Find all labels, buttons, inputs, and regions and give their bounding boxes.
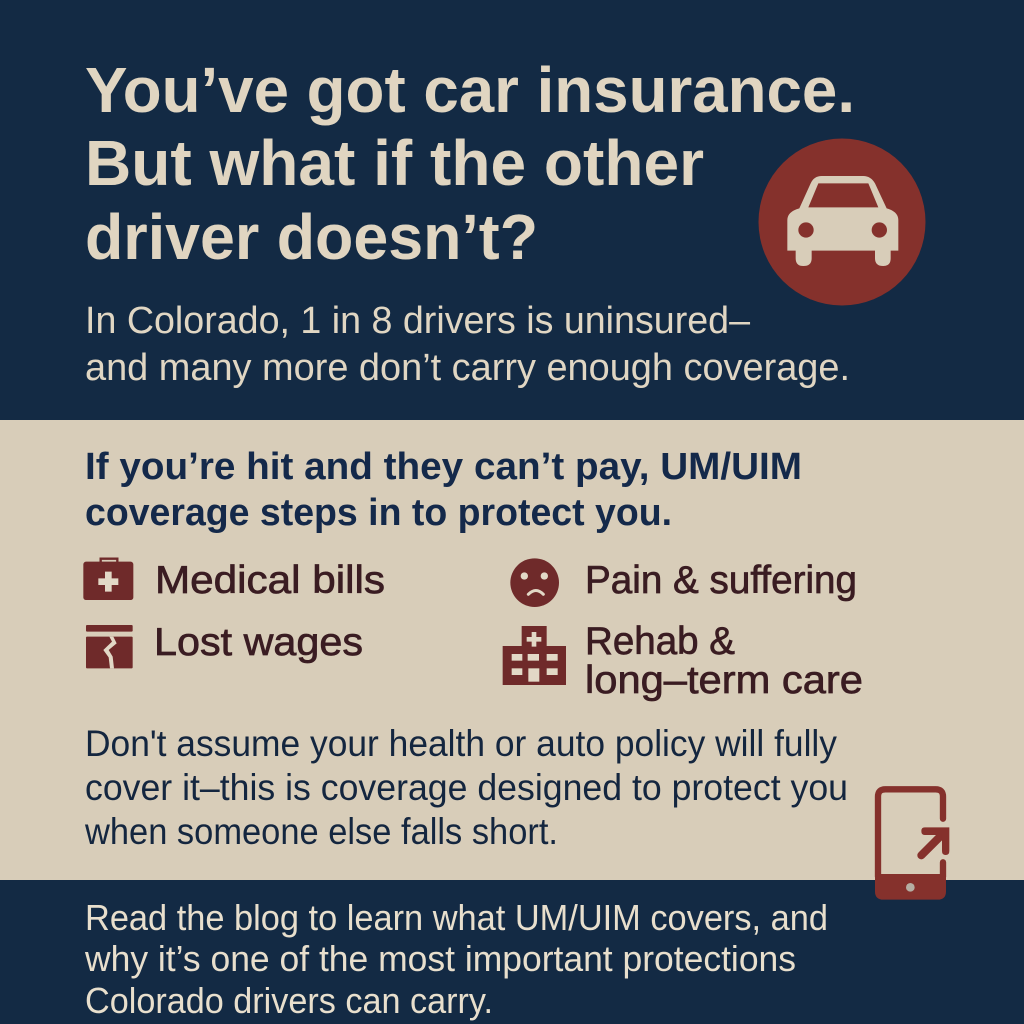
subtitle: and many more don’t carry enough coverage. bbox=[85, 347, 850, 389]
title: You’ve got car insurance. bbox=[85, 54, 855, 126]
section heading: coverage steps in to protect you. bbox=[85, 492, 672, 534]
label: rehab and long-term care: Rehab & bbox=[585, 620, 735, 663]
label: lost wages: Lost wages bbox=[154, 621, 363, 664]
icon: car in red circle bbox=[758, 138, 926, 306]
body text: cover it–this is coverage designed to protect you bbox=[85, 767, 848, 808]
footer text bbox=[84, 897, 828, 1021]
title bbox=[85, 54, 855, 273]
icon: medical bag bbox=[83, 559, 133, 600]
icon: hospital bbox=[503, 626, 566, 685]
body text: when someone else falls short. bbox=[84, 811, 558, 852]
footer text: Read the blog to learn what UM/UIM covers, and bbox=[85, 897, 828, 938]
label: medical bills: Medical bills bbox=[155, 559, 385, 602]
panel: top header bbox=[0, 0, 1024, 420]
panel: coverage details bbox=[0, 420, 1024, 880]
section heading bbox=[85, 446, 802, 534]
footer text: Colorado drivers can carry. bbox=[85, 980, 493, 1021]
section heading: If you’re hit and they can’t pay, UM/UIM bbox=[85, 446, 802, 488]
panel: footer call to action bbox=[0, 880, 1024, 1024]
icon: phone with share arrow bbox=[875, 789, 949, 900]
body text: Don't assume your health or auto policy will fully bbox=[85, 723, 837, 764]
subtitle: In Colorado, 1 in 8 drivers is uninsured– bbox=[85, 300, 751, 342]
title: But what if the other bbox=[85, 127, 704, 199]
body text bbox=[84, 723, 848, 852]
footer text: why it’s one of the most important protections bbox=[84, 938, 796, 979]
subtitle bbox=[85, 300, 850, 389]
label: pain and suffering: Pain & suffering bbox=[585, 559, 857, 602]
label: rehab and long-term care: long–term care bbox=[585, 659, 863, 702]
icon: broken wallet bbox=[86, 625, 133, 668]
icon: sad face bbox=[510, 558, 559, 607]
label: rehab and long-term care bbox=[585, 620, 863, 702]
title: driver doesn’t? bbox=[85, 201, 538, 273]
